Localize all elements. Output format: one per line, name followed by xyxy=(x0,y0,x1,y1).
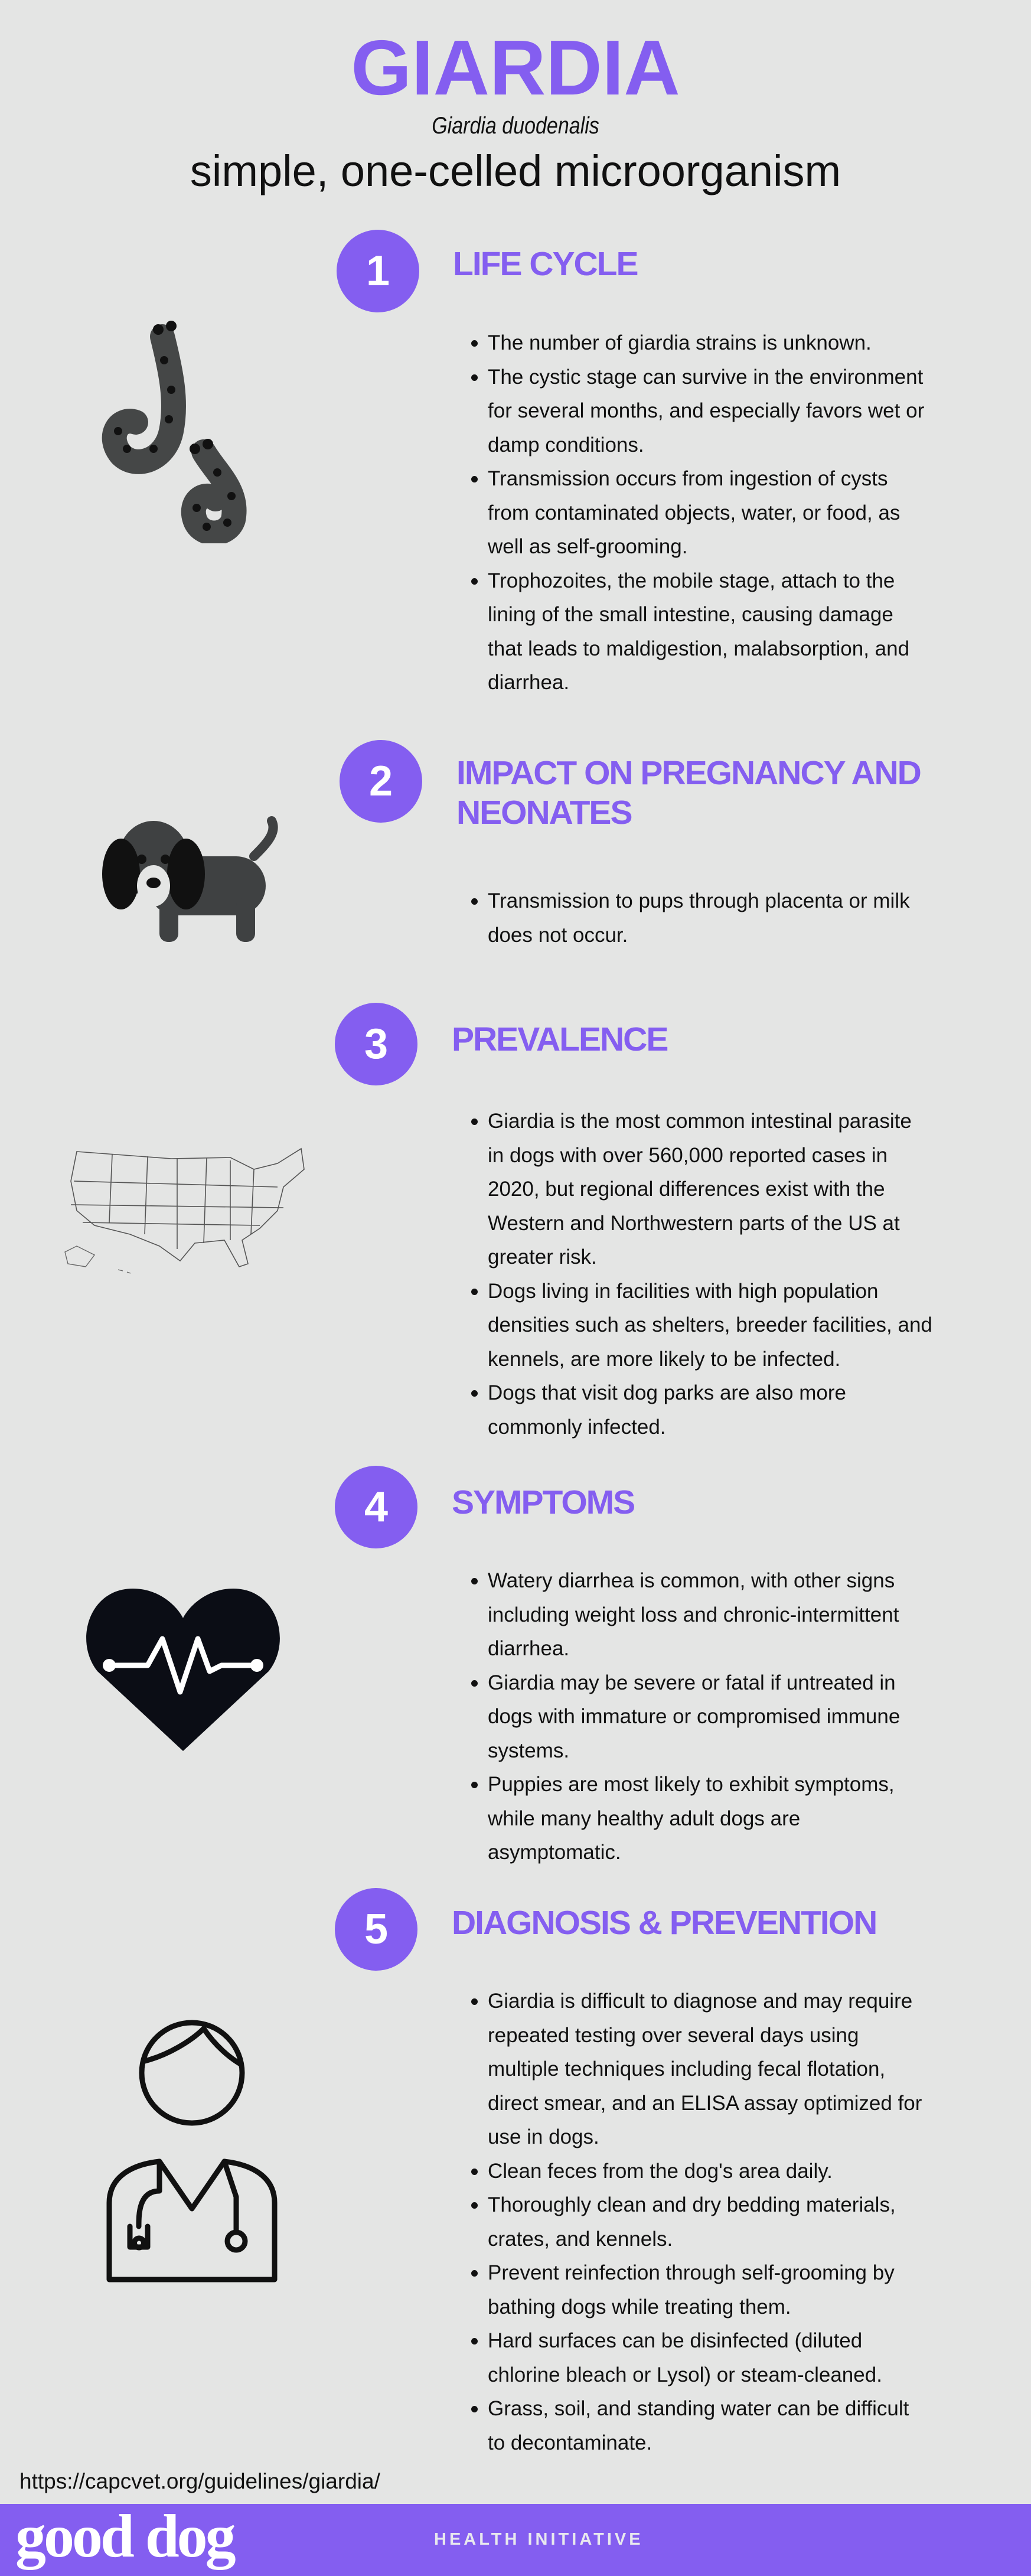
bullets: symptoms: including weight loss and chronic-intermittent xyxy=(488,1603,899,1626)
number circle 1: 1 xyxy=(366,247,390,295)
bullets: diagnosis: use in dogs. xyxy=(488,2125,599,2148)
bullets: symptoms: while many healthy adult dogs are xyxy=(488,1807,800,1830)
icon: heart xyxy=(86,1589,280,1751)
heading: impact on pregnancy: IMPACT ON PREGNANCY AND xyxy=(456,754,921,792)
icon: US map xyxy=(64,1148,305,1274)
bullets: diagnosis: Prevent reinfection through self-grooming by xyxy=(488,2261,895,2284)
number circle 1 xyxy=(337,230,419,312)
bullets: prevalence: Dogs living in facilities with high population xyxy=(488,1279,878,1303)
title: GIARDIA xyxy=(351,24,680,111)
bullets: symptoms: Puppies are most likely to exhibit symptoms, xyxy=(488,1773,895,1796)
number circle 4 xyxy=(335,1466,417,1548)
bullets: prevalence: commonly infected. xyxy=(488,1415,666,1439)
bullets: diagnosis: to decontaminate. xyxy=(488,2431,652,2454)
heading: impact on pregnancy: NEONATES xyxy=(456,794,631,832)
number circle 5 xyxy=(335,1888,417,1971)
bullets: prevalence xyxy=(471,1110,932,1439)
bullets: diagnosis: Giardia is difficult to diagnose and may require xyxy=(488,1990,912,2013)
bullets: diagnosis: bathing dogs while treating them. xyxy=(488,2295,791,2319)
bullets: prevalence: kennels, are more likely to be infected. xyxy=(488,1348,840,1370)
footer band xyxy=(0,2504,1031,2576)
bullets: symptoms: Giardia may be severe or fatal if untreated in xyxy=(488,1671,896,1694)
bullets: life cycle: Trophozoites, the mobile stage, attach to the xyxy=(488,569,895,592)
icon: dog xyxy=(102,816,278,942)
bullets: prevalence: Western and Northwestern parts of the US at xyxy=(488,1212,900,1234)
bullets: symptoms: diarrhea. xyxy=(488,1637,569,1660)
bullets: life cycle: lining of the small intestine, causing damage xyxy=(488,603,893,626)
heading: impact on pregnancy xyxy=(456,754,921,832)
bullets: diagnosis: Thoroughly clean and dry bedding materials, xyxy=(488,2193,896,2216)
number circle 3: 3 xyxy=(364,1020,388,1068)
logo: good dog: good dog xyxy=(15,2502,234,2570)
scientific name: Giardia duodenalis xyxy=(432,113,599,139)
icon: doctor xyxy=(106,2020,278,2282)
bullets: prevalence: 2020, but regional differences exist with the xyxy=(488,1178,885,1201)
bullets: diagnosis: crates, and kennels. xyxy=(488,2228,673,2250)
heading: life cycle: LIFE CYCLE xyxy=(453,245,638,283)
bullets: diagnosis: Grass, soil, and standing water can be difficult xyxy=(488,2397,909,2420)
number circle 3 xyxy=(335,1003,417,1085)
bullets: diagnosis: chlorine bleach or Lysol) or steam-cleaned. xyxy=(488,2363,882,2386)
bullets: symptoms: Watery diarrhea is common, with other signs xyxy=(488,1569,895,1592)
bullets: symptoms: dogs with immature or compromised immune xyxy=(488,1705,900,1728)
heading: symptoms: SYMPTOMS xyxy=(452,1483,634,1521)
bullets: life cycle: The number of giardia strains is unknown. xyxy=(488,331,872,354)
number circle 5: 5 xyxy=(364,1906,388,1953)
section 5: diagnosis & prevention xyxy=(106,1888,922,2454)
bullets: diagnosis: Hard surfaces can be disinfected (diluted xyxy=(488,2329,862,2352)
heading: diagnosis: DIAGNOSIS & PREVENTION xyxy=(452,1904,876,1942)
bullets: prevalence: greater risk. xyxy=(488,1245,597,1269)
bullets: life cycle: The cystic stage can survive in the environment xyxy=(488,365,923,389)
bullets: life cycle: Transmission occurs from ingestion of cysts xyxy=(488,467,888,490)
bullets: life cycle: well as self-grooming. xyxy=(488,535,687,558)
bullets: diagnosis xyxy=(471,1990,922,2454)
section 1: life cycle xyxy=(102,230,924,694)
bullets: life cycle: diarrhea. xyxy=(488,671,569,694)
bullets: life cycle: from contaminated objects, water, or food, as xyxy=(488,501,900,524)
number circle 2 xyxy=(340,740,422,823)
bullets: pregnancy: does not occur. xyxy=(488,924,628,946)
bullets: life cycle xyxy=(471,331,924,694)
section 4: symptoms xyxy=(86,1466,900,1864)
source url: https://capcvet.org/guidelines/giardia/ xyxy=(19,2469,380,2493)
bullets: life cycle: damp conditions. xyxy=(488,433,644,456)
section 2: pregnancy xyxy=(102,740,921,946)
bullets: prevalence: Dogs that visit dog parks are also more xyxy=(488,1381,846,1404)
section 3: prevalence xyxy=(64,1003,932,1439)
number circle 2: 2 xyxy=(369,758,393,805)
bullets: pregnancy: Transmission to pups through placenta or milk xyxy=(488,889,910,912)
tagline: HEALTH INITIATIVE xyxy=(434,2530,644,2549)
bullets: life cycle: that leads to maldigestion, malabsorption, and xyxy=(488,637,909,660)
bullets: symptoms: systems. xyxy=(488,1739,569,1762)
bullets: life cycle: for several months, and especially favors wet or xyxy=(488,399,924,422)
bullets: pregnancy xyxy=(471,889,910,946)
bullets: prevalence: Giardia is the most common intestinal parasite xyxy=(488,1110,912,1133)
bullets: symptoms xyxy=(471,1569,900,1864)
bullets: diagnosis: direct smear, and an ELISA assay optimized for xyxy=(488,2092,922,2114)
bullets: symptoms: asymptomatic. xyxy=(488,1841,621,1864)
bullets: diagnosis: repeated testing over several days using xyxy=(488,2023,859,2047)
subtitle: simple, one-celled microorganism xyxy=(190,146,841,195)
bullets: diagnosis: multiple techniques including fecal flotation, xyxy=(488,2057,885,2081)
bullets: prevalence: densities such as shelters, breeder facilities, and xyxy=(488,1313,932,1336)
heading: prevalence: PREVALENCE xyxy=(452,1020,667,1058)
icon: worms xyxy=(102,321,247,543)
bullets: diagnosis: Clean feces from the dog's area daily. xyxy=(488,2159,833,2183)
number circle 4: 4 xyxy=(364,1483,388,1531)
bullets: prevalence: in dogs with over 560,000 reported cases in xyxy=(488,1143,888,1167)
